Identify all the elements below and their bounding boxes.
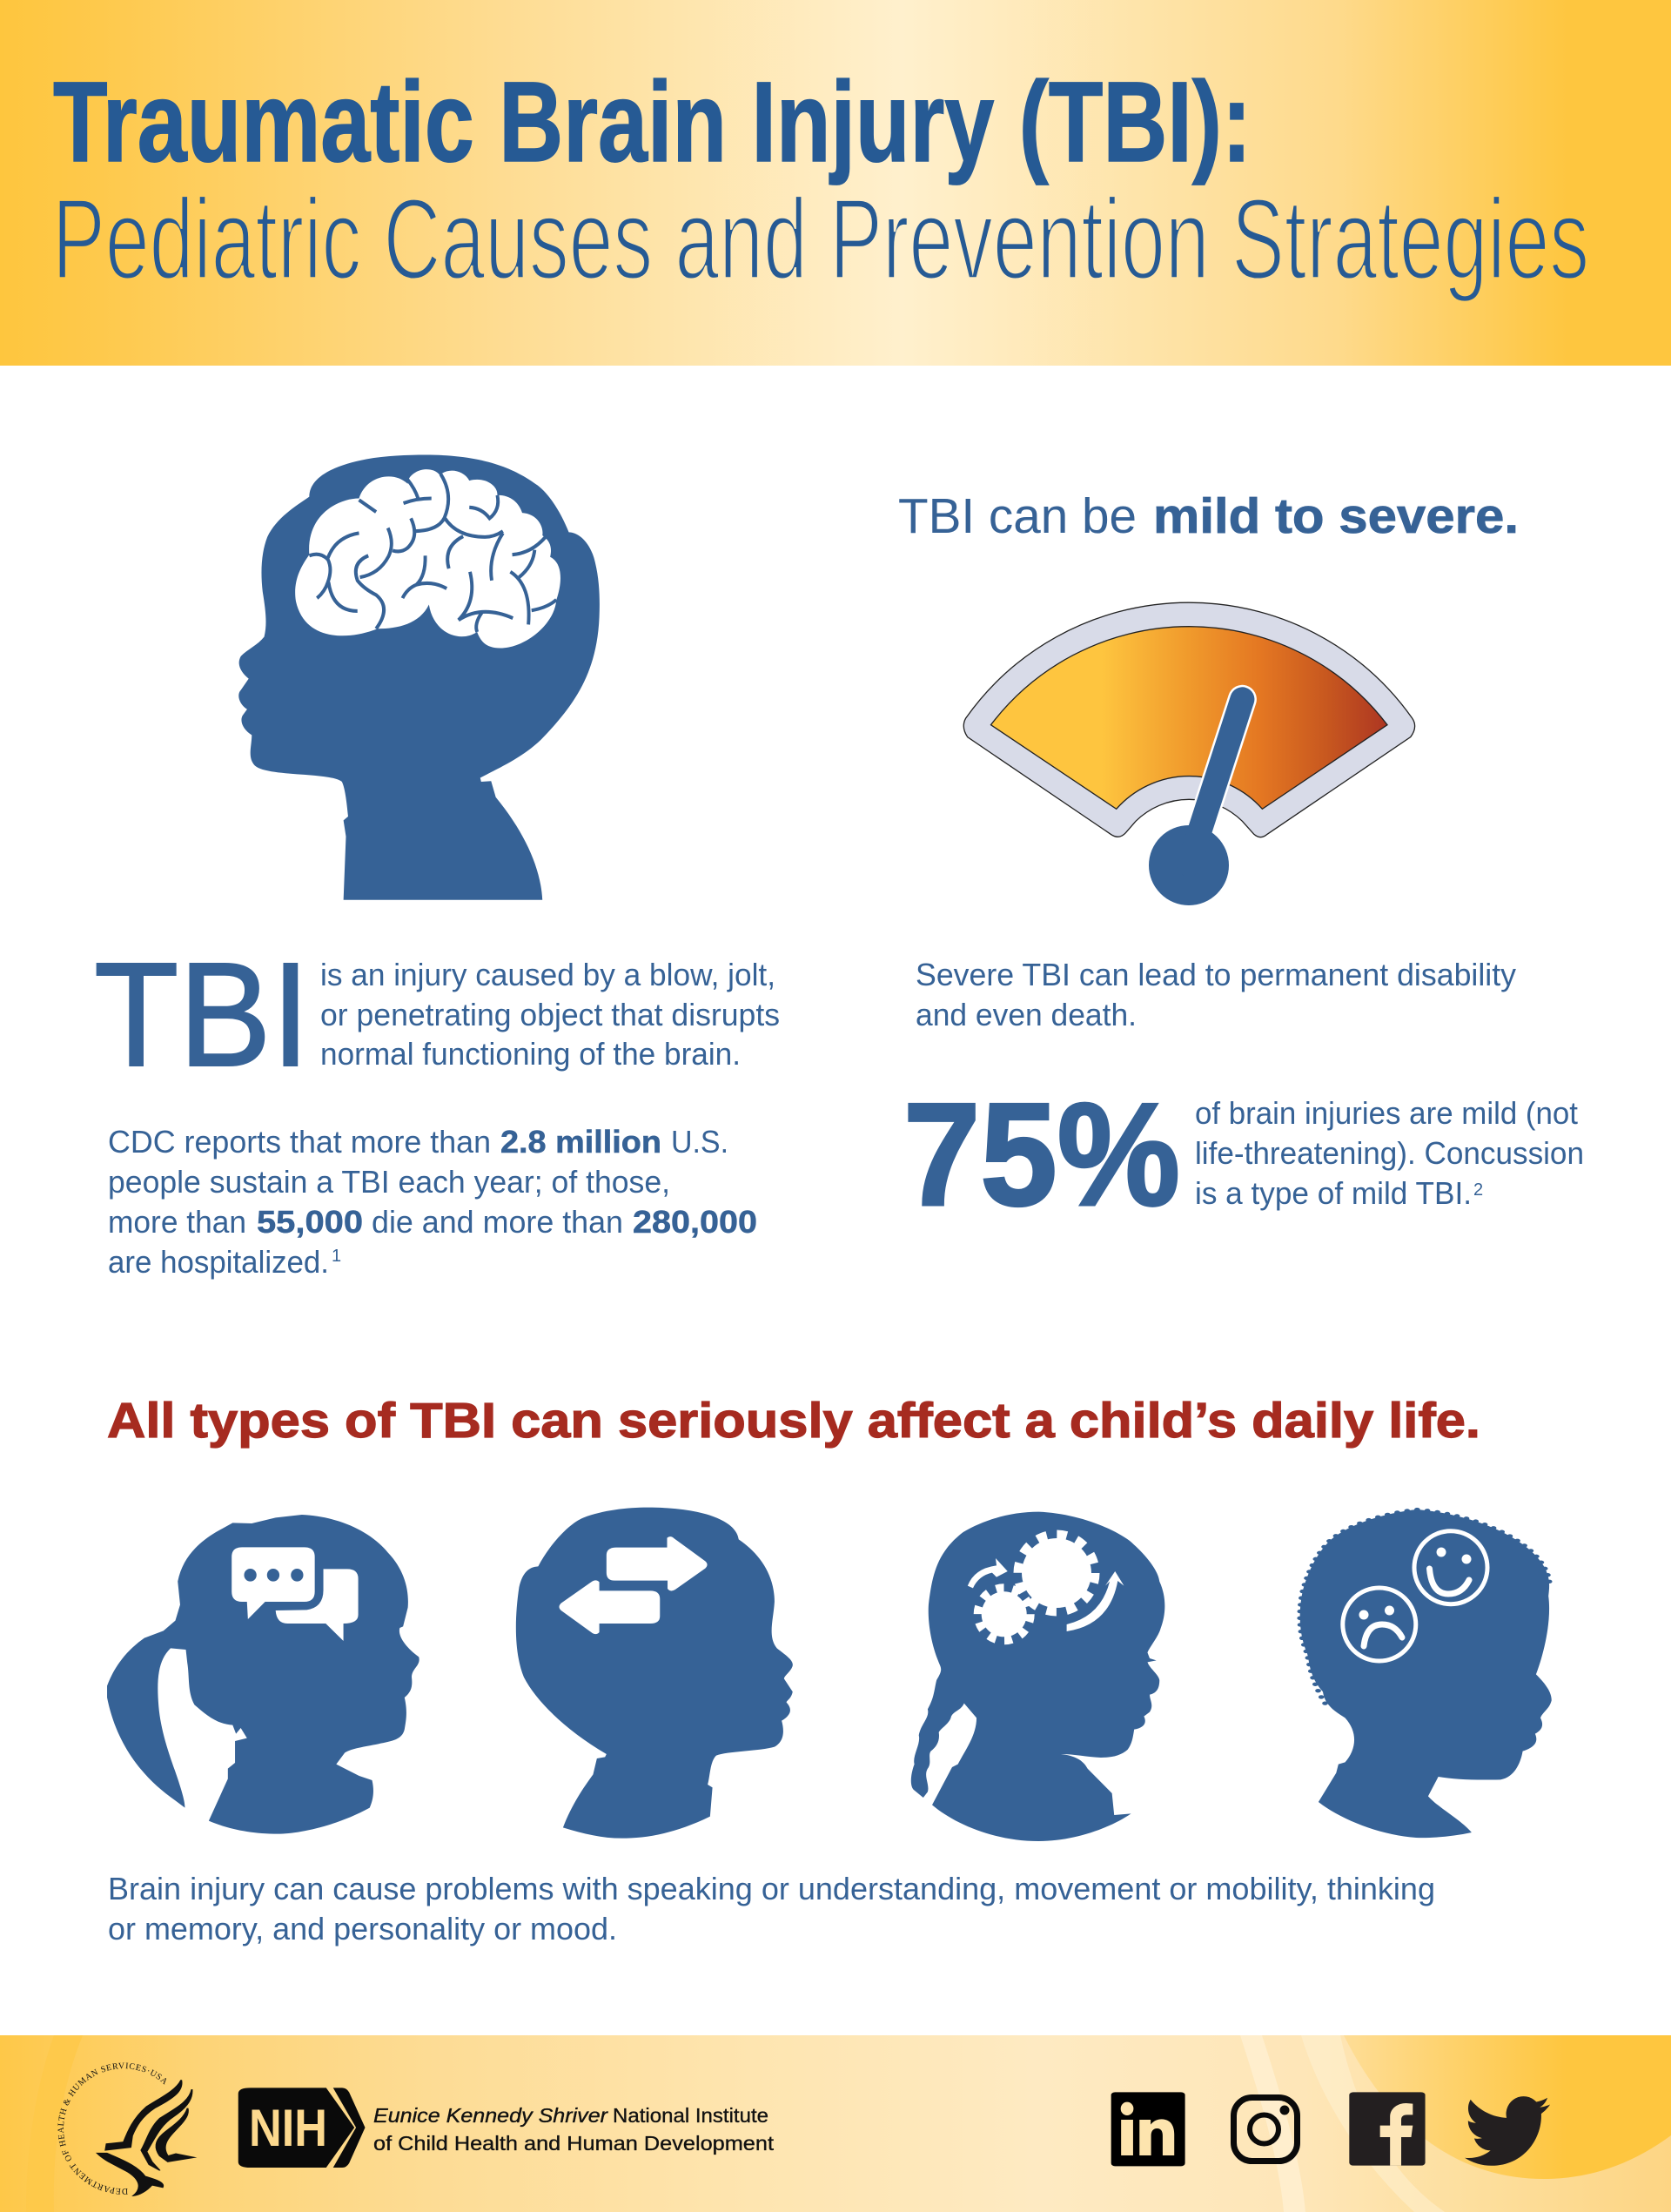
heading: daily life effects: All types of TBI can seriously affect a child’s daily life. — [107, 1393, 1480, 1449]
text: mild brain injuries: of brain injuries are mild (not — [1195, 1095, 1578, 1131]
text: NICHD name: Eunice Kennedy Shriver — [373, 2104, 608, 2127]
text: NICHD name: National Institute — [613, 2104, 768, 2127]
text: CDC statistics: CDC reports that more than — [108, 1124, 491, 1160]
icon: girl head with speech bubbles — [107, 1515, 419, 1834]
text: mild brain injuries: 2 — [1473, 1180, 1483, 1200]
text: CDC statistics: 1 — [332, 1247, 341, 1266]
speech bubbles — [232, 1547, 359, 1641]
text: CDC statistics: U.S. — [671, 1124, 728, 1160]
header banner — [0, 0, 1671, 366]
text: TBI definition: is an injury caused by a blow, jolt, — [320, 957, 775, 992]
icon: Twitter — [1465, 2096, 1550, 2166]
icon: LinkedIn — [1111, 2092, 1185, 2166]
heading: TBI can be mild to severe — [898, 488, 1519, 544]
text: CDC statistics — [108, 1124, 757, 1280]
text: TBI definition — [320, 957, 780, 1072]
text: severe TBI outcome — [916, 957, 1516, 1032]
text: mild brain injuries: is a type of mild TBI. — [1195, 1175, 1472, 1211]
icon: child head with brain — [238, 455, 600, 900]
big TBI label: TBI — [94, 932, 310, 1098]
text: NICHD name — [373, 2104, 775, 2155]
text: CDC statistics: people sustain a TBI each year; of those, — [108, 1164, 670, 1200]
text: TBI definition: or penetrating object that disrupts — [320, 997, 780, 1032]
text: mild brain injuries — [1195, 1095, 1584, 1211]
text: NICHD name: of Child Health and Human Development — [373, 2132, 775, 2155]
text: severe TBI outcome: Severe TBI can lead to permanent disability — [916, 957, 1516, 992]
gears — [968, 1535, 1124, 1640]
heading: TBI can be mild to severe: TBI can be — [898, 488, 1137, 544]
text: problems caused by brain injury: Brain injury can cause problems with speaking or understanding, movement or mobility, thinking — [108, 1871, 1435, 1906]
text: mild brain injuries: life-threatening). Concussion — [1195, 1135, 1584, 1171]
text: severe TBI outcome: and even death. — [916, 997, 1137, 1032]
text: CDC statistics: 2.8 million — [500, 1124, 661, 1160]
text: CDC statistics: are hospitalized. — [108, 1244, 329, 1280]
text: CDC statistics: die and more than — [372, 1204, 623, 1240]
text: CDC statistics: 280,000 — [633, 1204, 757, 1240]
text: problems caused by brain injury — [108, 1871, 1435, 1946]
text: TBI definition: normal functioning of the brain. — [320, 1036, 741, 1072]
logo: NIH — [238, 2088, 365, 2168]
logo: HHS seal: DEPARTMENT OF HEALTH & HUMAN SERVICES·USA — [57, 2063, 166, 2195]
title: Traumatic Brain Injury (TBI): — [53, 57, 1252, 185]
brain — [295, 469, 560, 648]
text: CDC statistics: more than — [108, 1204, 246, 1240]
text: problems caused by brain injury: or memory, and personality or mood. — [108, 1911, 617, 1946]
icon: severity gauge — [963, 602, 1415, 905]
mood faces — [1343, 1531, 1487, 1661]
icon: Instagram — [1234, 2098, 1297, 2161]
arrows — [560, 1536, 708, 1634]
logo: NIH: NIH — [249, 2099, 327, 2157]
heading: TBI can be mild to severe: mild to severe. — [1153, 488, 1519, 544]
icon: girl head with gears — [911, 1512, 1164, 1841]
text: CDC statistics: 55,000 — [257, 1204, 363, 1240]
icon: Facebook — [1349, 2092, 1426, 2166]
statistic: 75%: 75% — [903, 1072, 1180, 1236]
icon: head with movement arrows — [516, 1508, 793, 1839]
icon: boy head with mood faces — [1300, 1509, 1552, 1838]
footer band — [0, 2035, 1671, 2212]
